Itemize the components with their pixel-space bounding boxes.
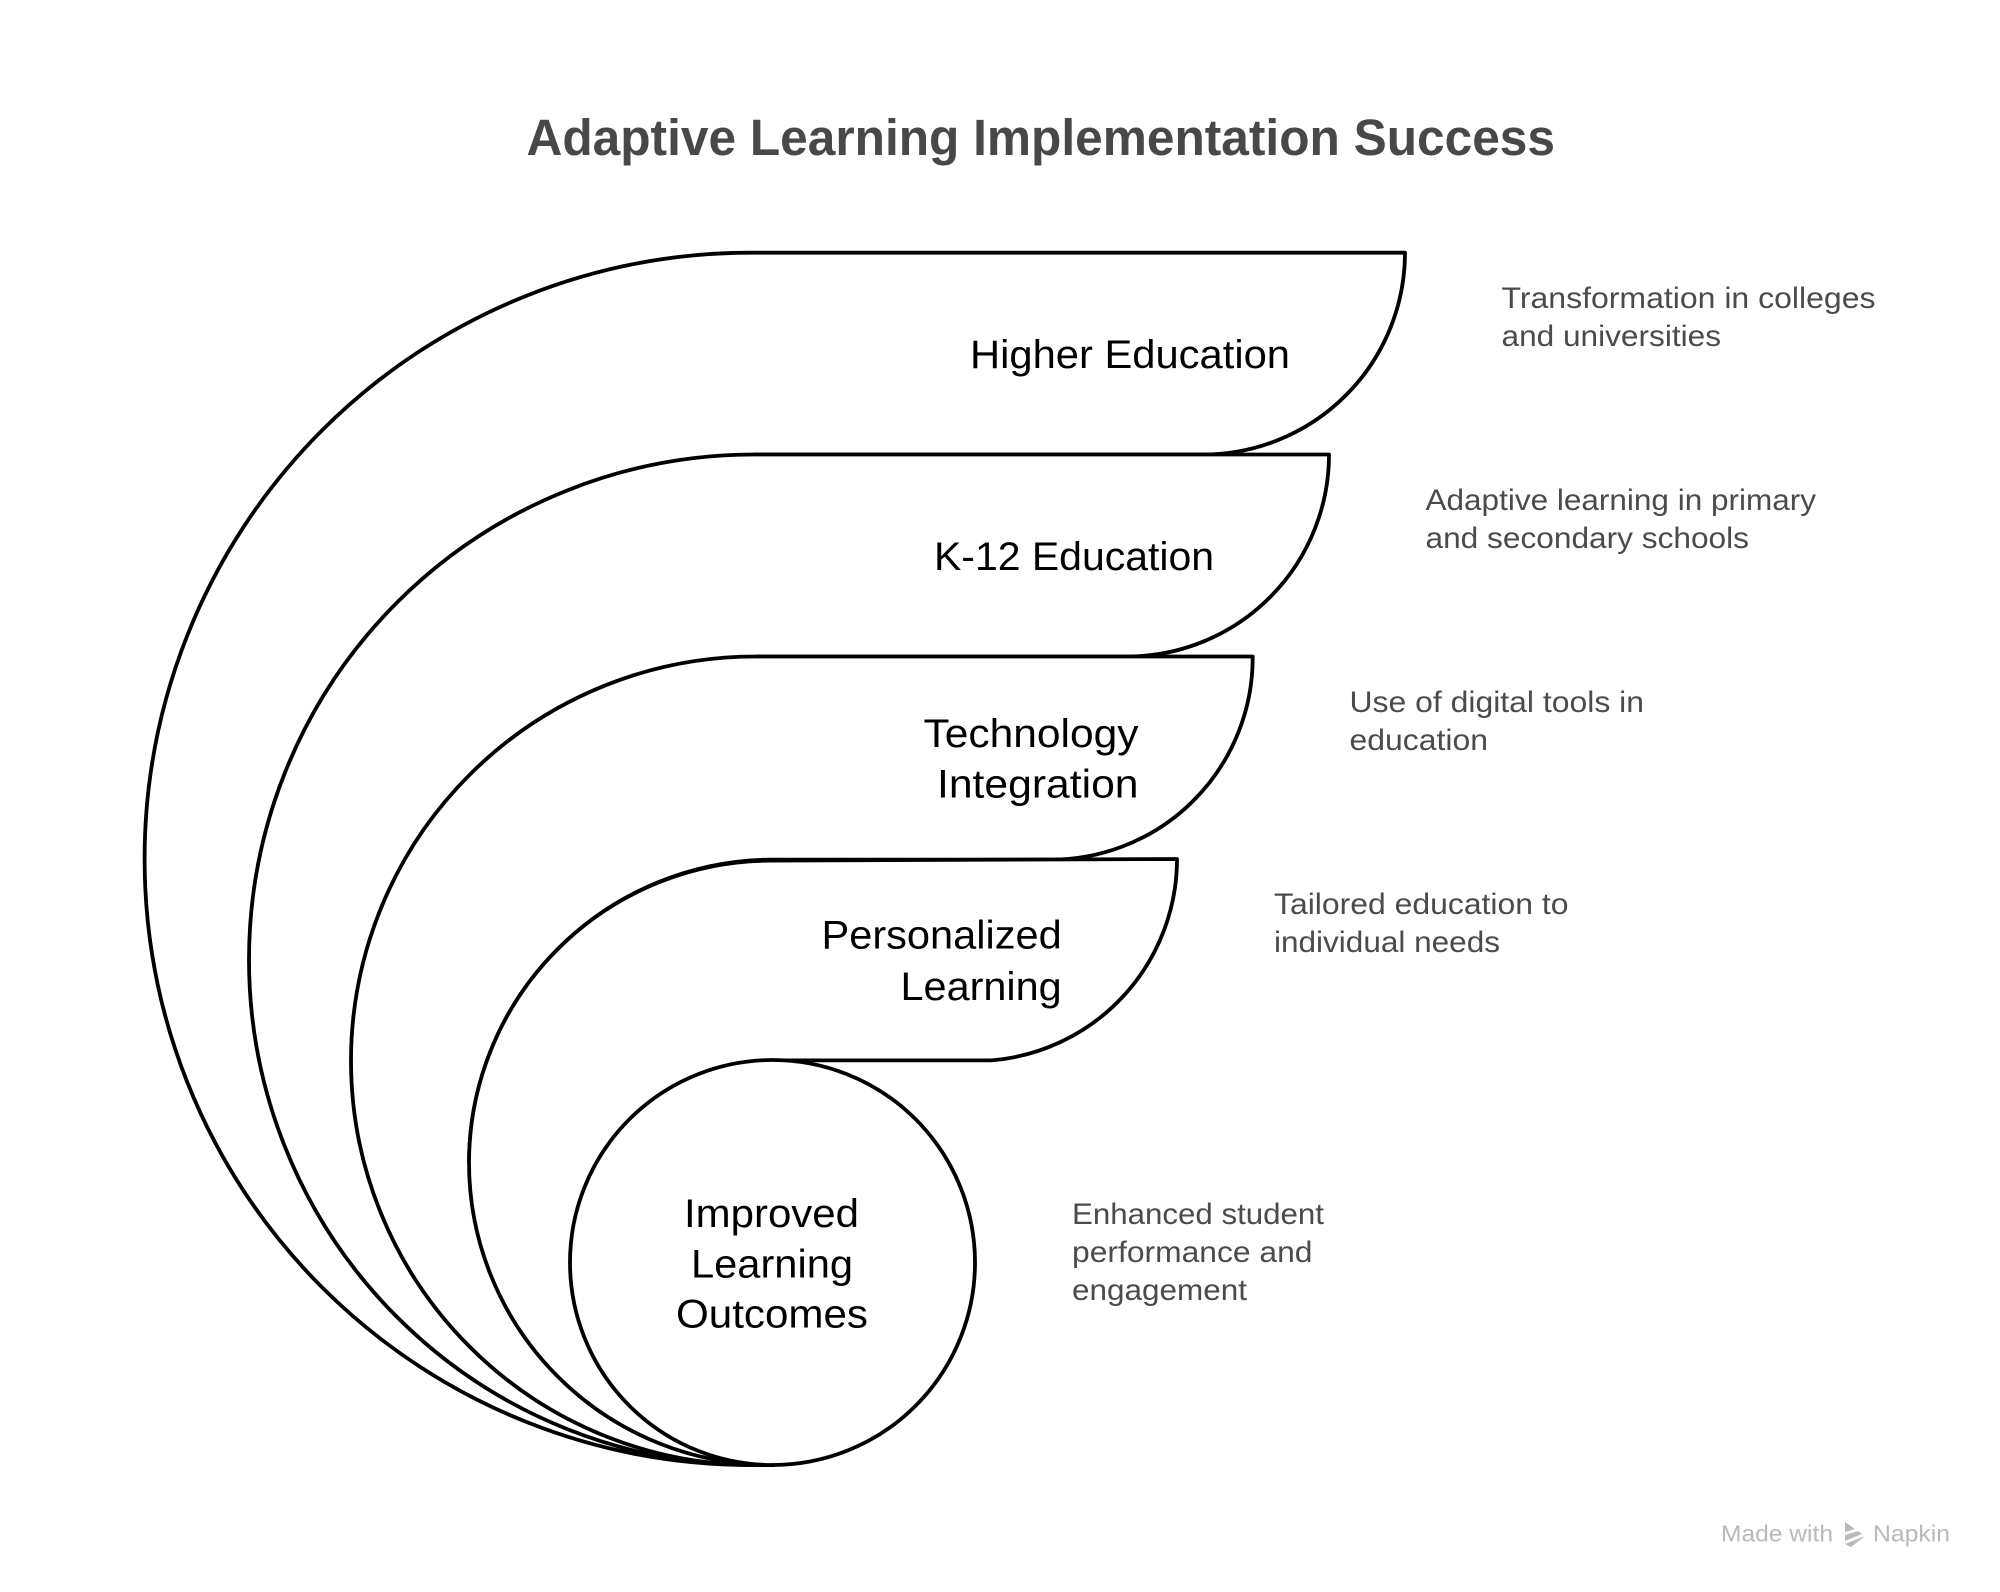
label: Outcomes: Outcomes	[676, 1292, 868, 1336]
description: K-12 Education: Adaptive learning in primary	[1426, 484, 1816, 517]
title: Adaptive Learning Implementation Success	[526, 109, 1555, 166]
description: Personalized Learning: individual needs	[1274, 926, 1500, 959]
description: Personalized Learning	[1274, 888, 1568, 959]
description: Higher Education: Transformation in colleges	[1502, 282, 1876, 315]
panel: Personalized Learning band	[469, 859, 1177, 1465]
label: Higher Education: Higher Education	[970, 333, 1290, 377]
description: Higher Education	[1502, 282, 1876, 353]
diagram: nested learning layers	[145, 253, 1405, 1465]
description: Improved Learning Outcomes: performance and	[1072, 1236, 1312, 1269]
description: Personalized Learning: Tailored education to	[1274, 888, 1568, 921]
label: Learning: Learning	[691, 1242, 853, 1286]
description: Higher Education: and universities	[1502, 320, 1721, 353]
description: Improved Learning Outcomes: Enhanced student	[1072, 1198, 1324, 1231]
description: Technology Integration	[1350, 686, 1644, 757]
label: Technology: Technology	[924, 712, 1138, 756]
label: Integration: Integration	[937, 762, 1138, 806]
watermark: Made with Napkin: Made with	[1721, 1521, 1833, 1547]
description: Improved Learning Outcomes	[1072, 1198, 1324, 1307]
watermark: Made with Napkin	[1721, 1521, 1950, 1547]
panel: Improved Learning Outcomes circle	[570, 1060, 975, 1465]
watermark: Made with Napkin: Napkin	[1873, 1521, 1950, 1547]
description: Technology Integration: Use of digital tools in	[1350, 686, 1644, 719]
description: Improved Learning Outcomes: engagement	[1072, 1274, 1247, 1307]
description: Technology Integration: education	[1350, 724, 1488, 757]
label: Personalized: Personalized	[822, 914, 1062, 958]
panel: Technology Integration band	[351, 656, 1253, 1465]
description: K-12 Education	[1426, 484, 1816, 555]
icon: Napkin logo	[1845, 1522, 1865, 1547]
label: Improved: Improved	[684, 1192, 859, 1236]
description: K-12 Education: and secondary schools	[1426, 522, 1749, 555]
label: K-12 Education: K-12 Education	[934, 535, 1214, 579]
label: Learning: Learning	[900, 965, 1062, 1009]
